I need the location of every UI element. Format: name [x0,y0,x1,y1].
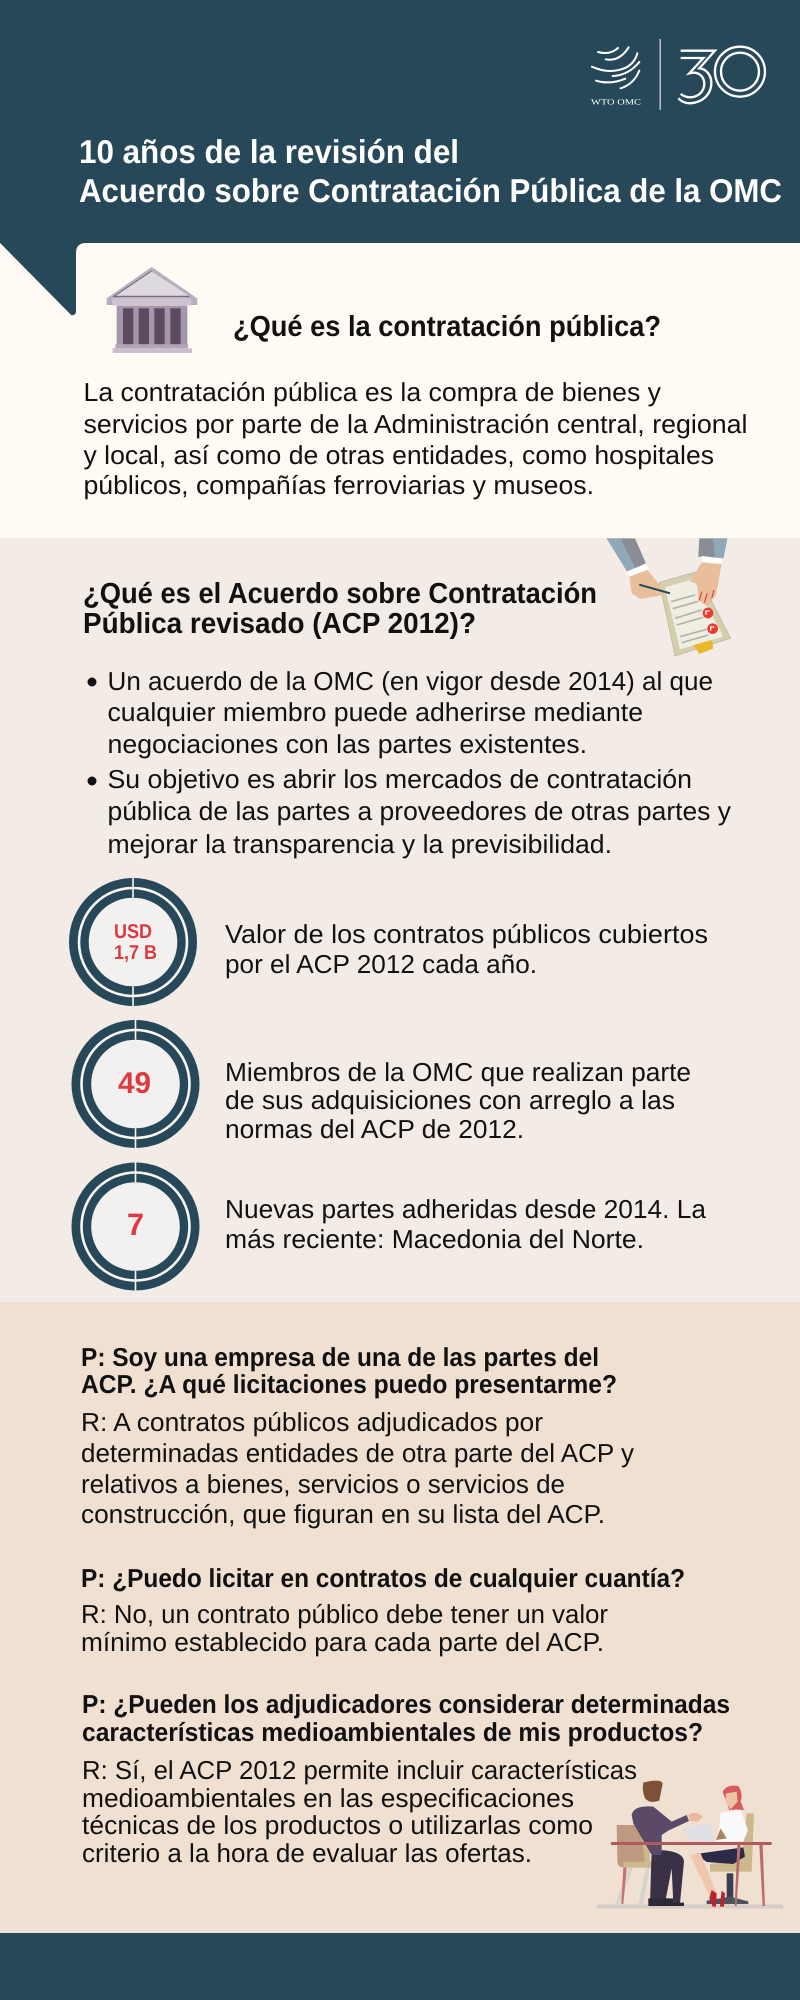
panel: qué es el ACP 2012 [0,538,800,1302]
logo: WTO OMC 30 years: WTO OMC [591,98,641,106]
text: pregunta 1: ACP. ¿A qué licitaciones puedo presentarme? [81,1369,617,1399]
panel: qué es la contratación pública [0,243,800,538]
heading: qué es el ACP [83,578,597,640]
text: bullet list: Un acuerdo de la OMC (en vigor desde 2014) al que [108,666,713,696]
text: pregunta 1: P: Soy una empresa de una de las partes del [81,1342,599,1372]
text: bullet list [88,666,731,859]
stat: 7 nuevas partes: 7 [127,1207,144,1242]
text: definition paragraph: y local, así como de otras entidades, como hospitales [84,440,714,470]
panel: preguntas y respuestas [0,1302,800,1933]
text: pregunta 1: R: A contratos públicos adjudicados por [81,1407,543,1437]
text: definition paragraph [84,377,748,500]
text: pregunta 3: P: ¿Pueden los adjudicadores considerar determinadas [82,1689,730,1719]
stat: USD 1,7 B: por el ACP 2012 cada año. [225,949,537,979]
stat: 49 miembros: Miembros de la OMC que realizan parte [225,1057,691,1087]
text: pregunta 2 [81,1563,685,1657]
stat: 7 nuevas partes: más reciente: Macedonia del Norte. [225,1224,644,1254]
text: pregunta 3: técnicas de los productos o utilizarlas como [82,1810,593,1840]
text: pregunta 3: medioambientales en las especificaciones [82,1783,574,1813]
text: pregunta 3: criterio a la hora de evaluar las ofertas. [82,1838,532,1868]
text: pregunta 3: características medioambientales de mis productos? [82,1717,703,1747]
title: 10 años de la revisión del [79,133,459,170]
title [79,133,782,209]
stat: 49 miembros: de sus adquisiciones con arreglo a las [225,1085,675,1115]
icon: classical building [107,267,197,353]
stat: 49 miembros: 49 [118,1067,151,1100]
text: pregunta 2: mínimo establecido para cada parte del ACP. [81,1627,604,1657]
stat: USD 1,7 B: 1,7 B [114,942,157,964]
text: bullet list: negociaciones con las partes existentes. [108,729,587,759]
text: pregunta 1: determinadas entidades de otra parte del ACP y [81,1438,634,1468]
text: bullet list: pública de las partes a proveedores de otras partes y [108,796,731,826]
heading: qué es la contratación pública: ¿Qué es la contratación pública? [233,311,661,343]
text: pregunta 3: R: Sí, el ACP 2012 permite incluir características [82,1755,637,1785]
stat: USD 1,7 B: Valor de los contratos públicos cubiertos [225,919,708,949]
icon: hands signing a document [607,538,731,656]
text: pregunta 1 [81,1342,634,1529]
stat: 7 nuevas partes: Nuevas partes adheridas desde 2014. La [225,1194,707,1224]
text: bullet list: cualquier miembro puede adherirse mediante [108,697,643,727]
stat: USD 1,7 B: USD [114,921,152,943]
text: definition paragraph: servicios por parte de la Administración central, regional [84,409,748,439]
title: Acuerdo sobre Contratación Pública de la OMC [79,172,782,209]
text: pregunta 2: P: ¿Puedo licitar en contratos de cualquier cuantía? [81,1563,685,1593]
text: pregunta 1: construcción, que figuran en su lista del ACP. [81,1499,605,1529]
heading: qué es el ACP: ¿Qué es el Acuerdo sobre Contratación [83,578,597,610]
logo: WTO OMC 30 years [591,39,765,110]
text: bullet list: Su objetivo es abrir los mercados de contratación [108,764,692,794]
icon: business meeting at a table [597,1781,783,1909]
text: pregunta 1: relativos a bienes, servicios o servicios de [81,1469,565,1499]
stat: 49 miembros: normas del ACP de 2012. [225,1114,524,1144]
text: bullet list: mejorar la transparencia y la previsibilidad. [108,829,612,859]
text: definition paragraph: La contratación pública es la compra de bienes y [84,377,661,407]
panel: footer [0,1933,800,2000]
text: pregunta 3 [82,1689,730,1868]
stat: USD 1,7 B [69,878,708,1006]
text: definition paragraph: públicos, compañías ferroviarias y museos. [84,470,594,500]
text: pregunta 2: R: No, un contrato público debe tener un valor [81,1599,608,1629]
heading: qué es el ACP: Pública revisado (ACP 2012)? [83,608,476,640]
stat: 49 miembros [72,1020,691,1148]
stat: 7 nuevas partes [72,1162,707,1290]
panel: header [0,0,800,315]
